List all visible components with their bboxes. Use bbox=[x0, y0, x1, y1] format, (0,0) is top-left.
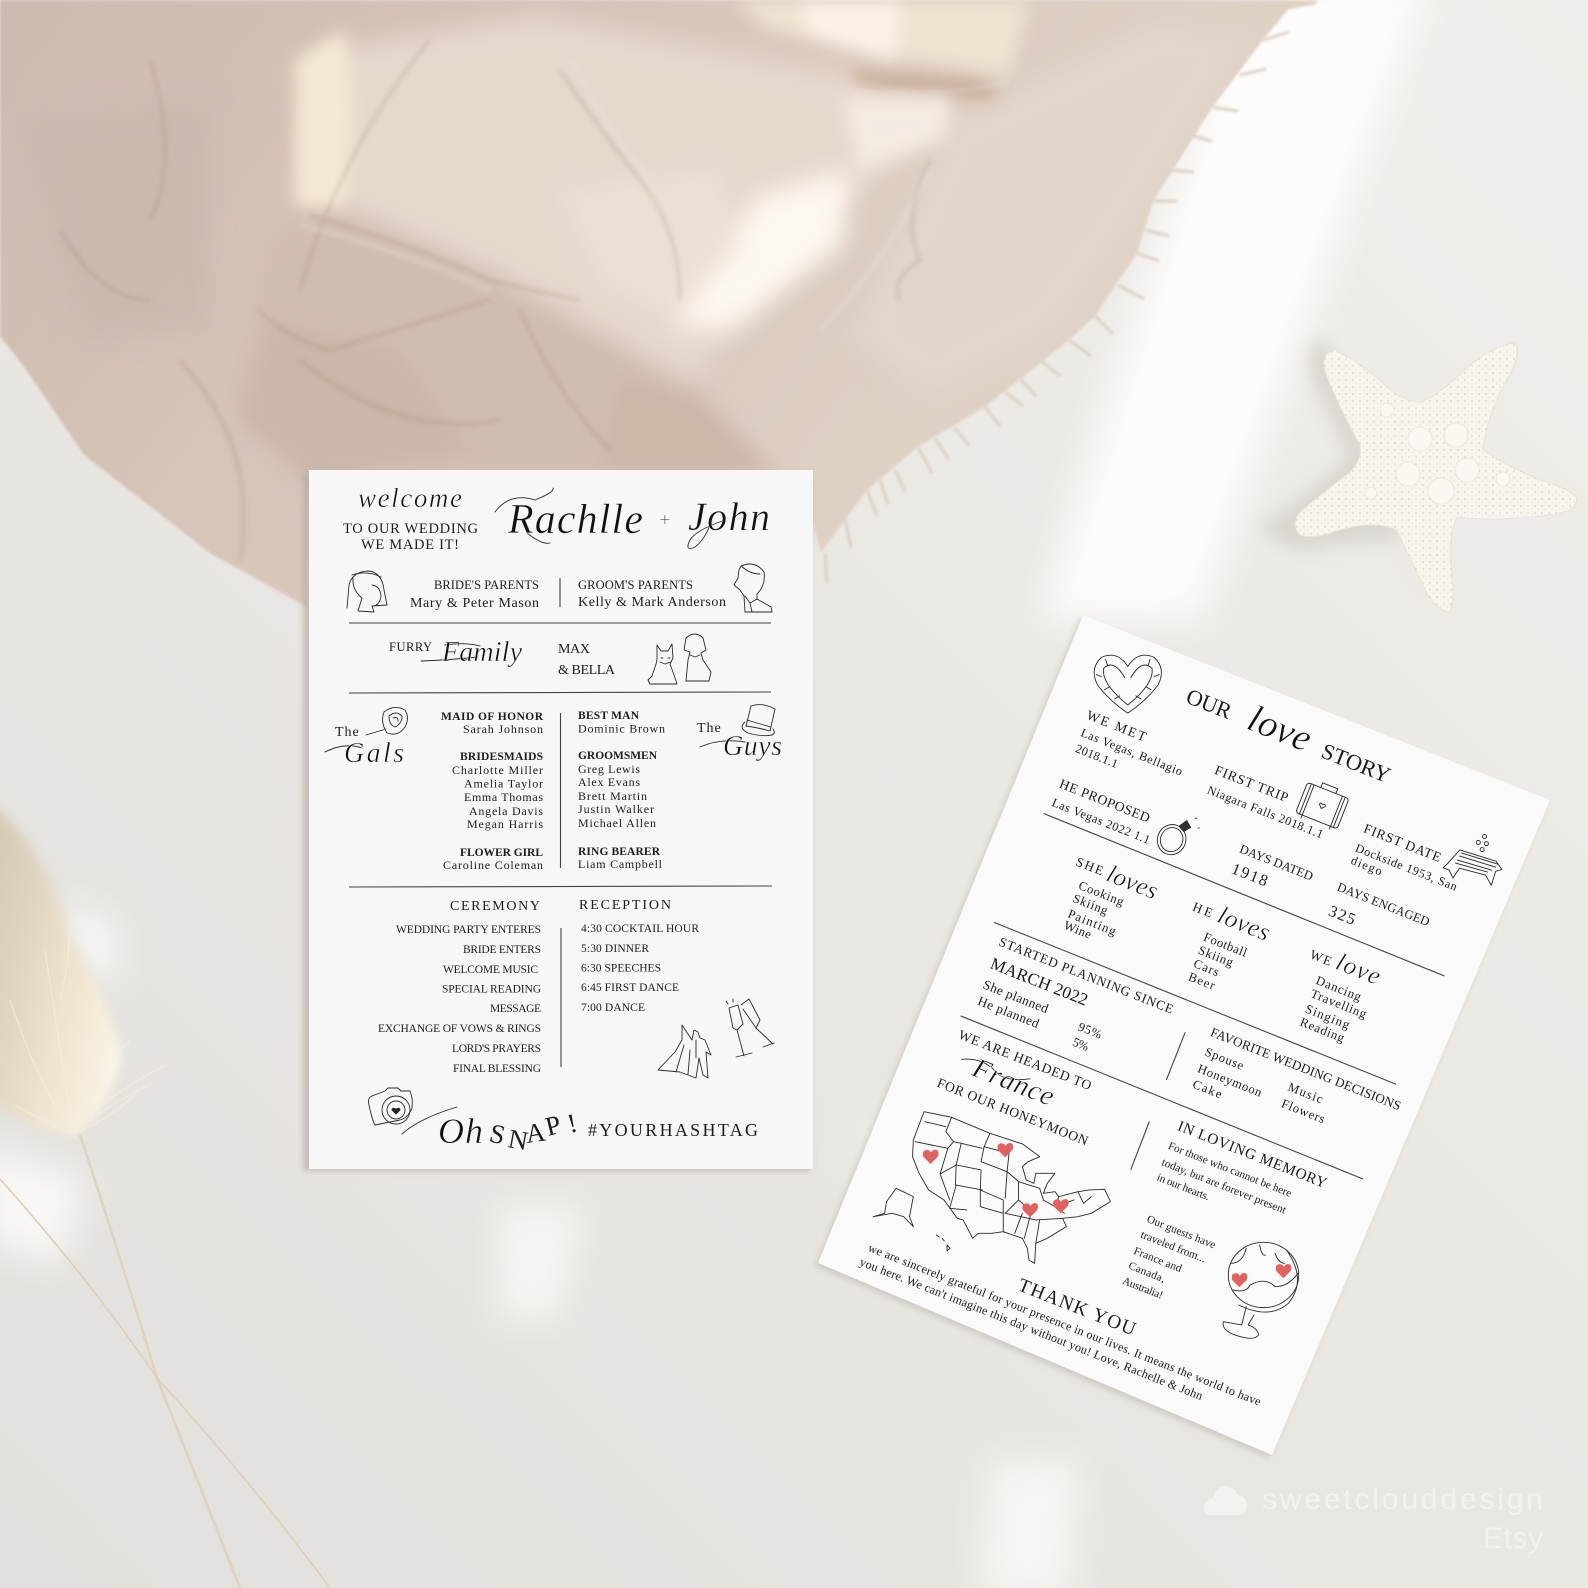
text: we met: 2018.1.1 bbox=[1074, 741, 1120, 771]
list: we love bbox=[1283, 938, 1386, 1050]
text: first date: FIRST DATE bbox=[1361, 821, 1443, 865]
text: guests traveled: Australia! bbox=[1121, 1275, 1165, 1302]
list: groom's attendants bbox=[578, 710, 665, 871]
icon: groom bbox=[734, 564, 772, 612]
text: guests traveled: France and bbox=[1132, 1245, 1184, 1275]
text: in loving memory: today, but are forever present bbox=[1160, 1157, 1289, 1217]
label: the guys with top hat: The bbox=[697, 721, 722, 736]
text: first trip: FIRST TRIP bbox=[1213, 762, 1291, 805]
text: groom's parents: GROOM'S PARENTS bbox=[578, 578, 693, 592]
list: bride's attendants: Sarah Johnson bbox=[463, 722, 543, 736]
heading: welcome: WE MADE IT! bbox=[361, 537, 459, 553]
list: she loves: Skiing bbox=[1071, 891, 1111, 918]
text: we met: Las Vegas, Bellagio bbox=[1079, 726, 1185, 778]
text: he proposed bbox=[1050, 776, 1160, 847]
text: we met: WE MET bbox=[1085, 707, 1149, 745]
icon: camera with heart bbox=[368, 1088, 457, 1134]
text: bride's parents: Mary & Peter Mason bbox=[410, 596, 539, 611]
map: united states with hearts bbox=[873, 1112, 1110, 1263]
stat: days engaged: DAYS ENGAGED bbox=[1335, 880, 1432, 929]
fringe bbox=[825, 3, 1316, 583]
text: furry family: FURRY bbox=[389, 640, 432, 654]
list: we love: WE bbox=[1308, 947, 1334, 969]
list: groom's attendants: Liam Campbell bbox=[578, 857, 663, 871]
text: guests traveled: traveled from... bbox=[1139, 1229, 1208, 1265]
schedule: ceremony: SPECIAL READING bbox=[442, 984, 541, 996]
list: he loves: Cars bbox=[1192, 956, 1221, 979]
text: oh snap hashtag: #YOURHASHTAG bbox=[588, 1120, 758, 1140]
list: bride's attendants: Angela Davis bbox=[469, 804, 543, 818]
text: bride's parents: BRIDE'S PARENTS bbox=[434, 578, 539, 592]
text: favorite wedding decisions: Cake bbox=[1191, 1077, 1224, 1101]
schedule: ceremony: LORD'S PRAYERS bbox=[452, 1043, 541, 1055]
schedule: ceremony bbox=[378, 899, 541, 1075]
list: groom's attendants: Alex Evans bbox=[578, 775, 640, 789]
text: honeymoon destination: WE ARE HEADED TO bbox=[956, 1027, 1094, 1093]
label: the gals with rose: Gals bbox=[344, 738, 404, 769]
icon: bench and hearts bbox=[1443, 833, 1503, 886]
list: groom's attendants: RING BEARER bbox=[578, 846, 661, 858]
list: bride's attendants: Emma Thomas bbox=[464, 790, 543, 804]
list: we love: Reading bbox=[1298, 1015, 1347, 1045]
text: started planning: MARCH 2022 bbox=[988, 954, 1091, 1010]
text: guests traveled: Canada, bbox=[1127, 1260, 1167, 1285]
text: he proposed: HE PROPOSED bbox=[1057, 776, 1152, 825]
watermark: sweetclouddesign etsy: sweetclouddesign bbox=[1262, 1483, 1543, 1516]
icon: cat and dog bbox=[648, 634, 711, 684]
text: honeymoon destination bbox=[935, 1026, 1110, 1148]
schedule: ceremony: CEREMONY bbox=[450, 899, 540, 914]
title: our love story: OUR bbox=[1183, 684, 1235, 724]
text: started planning: 5% bbox=[1071, 1035, 1091, 1054]
icon: dancing couple bbox=[658, 1025, 711, 1078]
text: in loving memory bbox=[1154, 1117, 1329, 1241]
text: started planning bbox=[973, 934, 1176, 1078]
text: thank you: we are sincerely grateful for your presence in our lives. It means the world to have bbox=[866, 1240, 1263, 1409]
text: furry family: Family bbox=[441, 637, 523, 668]
text: favorite wedding decisions: Flowers bbox=[1279, 1096, 1327, 1126]
list: groom's attendants: GROOMSMEN bbox=[578, 750, 658, 762]
list: she loves: Painting bbox=[1066, 907, 1119, 939]
schedule: reception: 5:30 DINNER bbox=[581, 943, 649, 955]
text: thank you: you here. We can't imagine this day without you! Love, Rachelle & John bbox=[858, 1255, 1205, 1403]
schedule: reception: 7:00 DANCE bbox=[581, 1002, 645, 1014]
text: guests traveled: Our guests have bbox=[1145, 1213, 1217, 1251]
text: started planning: He planned bbox=[976, 993, 1042, 1031]
list: he loves: Skiing bbox=[1196, 943, 1236, 970]
stat: days engaged bbox=[1325, 880, 1432, 954]
list: he loves: Beer bbox=[1186, 970, 1218, 993]
schedule: reception: 4:30 COCKTAIL HOUR bbox=[581, 923, 699, 935]
schedule: ceremony: EXCHANGE OF VOWS & RINGS bbox=[378, 1023, 541, 1035]
label: the guys with top hat bbox=[697, 705, 782, 762]
icon: ring bbox=[1153, 807, 1202, 862]
title: our love story bbox=[1181, 673, 1399, 793]
text: started planning: STARTED PLANNING SINCE bbox=[997, 934, 1176, 1017]
fabric: dusty pink scarf bbox=[0, 0, 1322, 607]
sunlight on fabric bbox=[295, 0, 1030, 205]
list: groom's attendants: Justin Walker bbox=[578, 802, 654, 816]
list: we love: Travelling bbox=[1309, 987, 1369, 1021]
text: pet names bbox=[558, 642, 616, 678]
list: bride's attendants: Charlotte Miller bbox=[452, 763, 543, 777]
text: first date: diego bbox=[1349, 853, 1384, 878]
list: she loves: loves bbox=[1103, 860, 1162, 905]
schedule: reception: 6:45 FIRST DANCE bbox=[581, 982, 679, 994]
text: pet names: MAX bbox=[558, 642, 590, 657]
list: bride's attendants: FLOWER GIRL bbox=[460, 847, 543, 859]
text: favorite wedding decisions: FAVORITE WEDDING DECISIONS bbox=[1208, 1024, 1403, 1113]
text: bride's parents bbox=[410, 578, 539, 611]
text: first date bbox=[1349, 821, 1467, 906]
text: thank you: THANK YOU bbox=[1015, 1275, 1139, 1340]
schedule: reception: RECEPTION bbox=[579, 898, 671, 913]
schedule: ceremony: WELCOME MUSIC bbox=[443, 964, 538, 976]
schedule: ceremony: FINAL BLESSING bbox=[453, 1063, 541, 1075]
text: started planning: She planned bbox=[981, 977, 1051, 1016]
watermark: sweetclouddesign etsy: Etsy bbox=[1483, 1522, 1543, 1555]
list: bride's attendants bbox=[441, 711, 544, 872]
watermark: sweetclouddesign etsy bbox=[1204, 1483, 1543, 1555]
schedule: ceremony: MESSAGE bbox=[490, 1003, 541, 1015]
list: he loves: HE bbox=[1191, 899, 1215, 920]
list: groom's attendants: BEST MAN bbox=[578, 710, 640, 722]
text: oh snap hashtag: Oh bbox=[438, 1111, 483, 1151]
list: groom's attendants: Greg Lewis bbox=[578, 762, 640, 776]
text: honeymoon destination: FOR OUR HONEYMOON bbox=[935, 1075, 1090, 1148]
text: favorite wedding decisions: Honeymoon bbox=[1196, 1062, 1265, 1100]
card: wedding program bbox=[303, 470, 813, 1171]
icon: suitcase bbox=[1295, 778, 1351, 832]
schedule: ceremony: BRIDE ENTERS bbox=[463, 944, 541, 956]
list: she loves: SHE bbox=[1074, 854, 1106, 878]
text: in loving memory: IN LOVING MEMORY bbox=[1175, 1118, 1329, 1192]
title: couple names: John bbox=[688, 494, 770, 539]
schedule: reception bbox=[579, 898, 699, 1014]
stat: days dated: DAYS DATED bbox=[1238, 842, 1315, 883]
starfish bbox=[1262, 338, 1577, 620]
list: groom's attendants: Dominic Brown bbox=[578, 722, 665, 736]
icon: alaska and hawaii bbox=[873, 1188, 950, 1251]
fold shading bbox=[173, 15, 1012, 474]
stat: days dated bbox=[1229, 842, 1315, 905]
text: groom's parents bbox=[578, 578, 726, 610]
text: in loving memory: For those who cannot be here bbox=[1166, 1140, 1293, 1200]
title: couple names: Rachlle bbox=[507, 497, 643, 543]
heading: welcome: TO OUR WEDDING bbox=[343, 521, 479, 537]
list: he loves: loves bbox=[1214, 901, 1274, 947]
text: honeymoon destination: France bbox=[967, 1052, 1059, 1113]
text: groom's parents: Kelly & Mark Anderson bbox=[578, 595, 726, 610]
schedule: reception: 6:30 SPEECHES bbox=[581, 962, 661, 974]
list: bride's attendants: BRIDESMAIDS bbox=[460, 751, 543, 763]
text: pet names: & BELLA bbox=[558, 663, 616, 678]
list: we love: Dancing bbox=[1314, 973, 1364, 1004]
icon: bride bbox=[347, 571, 387, 612]
stat: days dated: 1918 bbox=[1229, 860, 1270, 890]
text: we met bbox=[1072, 707, 1192, 794]
list: bride's attendants: MAID OF HONOR bbox=[441, 711, 544, 723]
list: we love: love bbox=[1332, 948, 1385, 991]
text: favorite wedding decisions: Music bbox=[1286, 1080, 1325, 1106]
list: she loves: Wine bbox=[1062, 918, 1094, 942]
list: groom's attendants: Brett Martin bbox=[578, 789, 647, 803]
pampas grass plume and stems bbox=[0, 805, 330, 1588]
text: first date: Dockside 1953, San bbox=[1353, 841, 1459, 894]
label: the guys with top hat: Guys bbox=[723, 731, 782, 762]
text: oh snap hashtag bbox=[438, 1108, 758, 1156]
icon: globe with hearts bbox=[1223, 1242, 1299, 1338]
label: the gals with rose: The bbox=[335, 725, 360, 740]
title: couple names bbox=[495, 488, 770, 548]
title: couple names: + bbox=[658, 509, 672, 531]
text: in loving memory: in our hearts. bbox=[1155, 1172, 1211, 1203]
text: started planning: 95% bbox=[1076, 1020, 1104, 1042]
list: he loves: Football bbox=[1202, 930, 1249, 960]
list: he loves bbox=[1166, 891, 1274, 1004]
list: bride's attendants: Caroline Coleman bbox=[443, 858, 543, 872]
text: furry family bbox=[389, 637, 523, 668]
divider bbox=[559, 578, 561, 607]
text: favorite wedding decisions bbox=[1188, 1024, 1403, 1164]
stat: days engaged: 325 bbox=[1326, 902, 1358, 929]
icon: heart wreath bbox=[1094, 655, 1161, 713]
schedule: ceremony: WEDDING PARTY ENTERES bbox=[396, 924, 541, 936]
text: he proposed: Las Vegas 2022 1.1 bbox=[1050, 795, 1152, 847]
list: bride's attendants: Amelia Taylor bbox=[464, 776, 543, 790]
text: first trip bbox=[1205, 762, 1333, 841]
text: guests traveled bbox=[1120, 1213, 1217, 1313]
text: first trip: Niagara Falls 2018.1.1 bbox=[1205, 783, 1325, 841]
text: favorite wedding decisions: Spouse bbox=[1203, 1045, 1246, 1073]
text: oh snap hashtag: SNAP! bbox=[487, 1108, 580, 1156]
rule bbox=[1042, 813, 1446, 976]
list: we love: Singing bbox=[1303, 1002, 1352, 1032]
icon: champagne flutes bbox=[726, 999, 774, 1057]
list: groom's attendants: Michael Allen bbox=[578, 816, 656, 830]
heading: welcome: welcome bbox=[358, 483, 462, 513]
heading: welcome bbox=[343, 483, 479, 553]
label: the gals with rose bbox=[325, 707, 408, 769]
list: she loves: Cooking bbox=[1077, 878, 1127, 909]
title: our love story: STORY bbox=[1318, 738, 1394, 788]
list: bride's attendants: Megan Harris bbox=[467, 817, 543, 831]
card: our love story bbox=[815, 615, 1550, 1458]
crease lines bbox=[60, 40, 1010, 560]
title: our love story: love bbox=[1242, 698, 1318, 760]
list: she loves bbox=[1051, 847, 1162, 958]
